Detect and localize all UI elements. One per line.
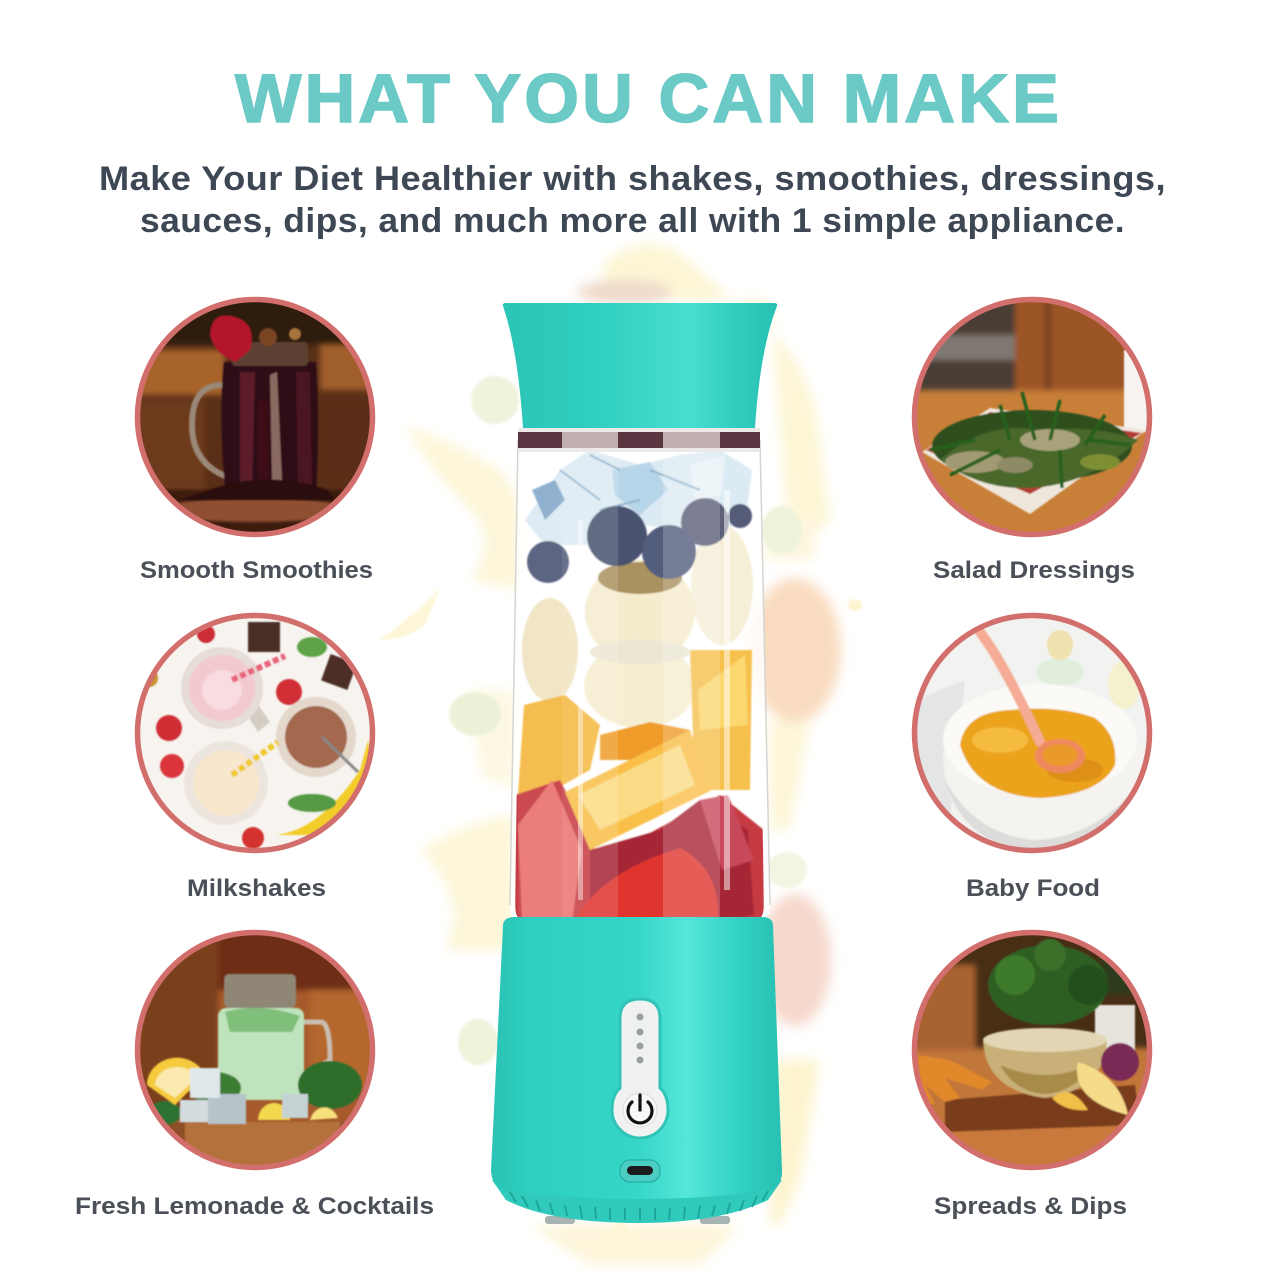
ring xyxy=(914,616,1150,850)
ring xyxy=(914,300,1150,534)
photo: chocolate smoothie jar xyxy=(140,302,370,532)
blender xyxy=(491,303,782,1224)
glass jar with fruit xyxy=(510,440,770,930)
title: WHAT YOU CAN MAKE xyxy=(235,60,1062,137)
label: Salad Dressings xyxy=(933,557,1135,584)
teal lid xyxy=(503,303,777,428)
subtitle: Make Your Diet Healthier with shakes, smoothies, dressings, xyxy=(99,160,1166,198)
photo: dip bowl with herbs xyxy=(917,935,1147,1165)
label: Milkshakes xyxy=(187,875,326,902)
ring xyxy=(138,300,372,534)
infographic canvas xyxy=(76,73,1164,1270)
panel: salad dressings xyxy=(910,295,1160,584)
panel: baby food xyxy=(910,610,1160,902)
ring xyxy=(138,616,372,850)
teal motor base xyxy=(491,917,782,1224)
panel: smooth smoothies xyxy=(130,295,380,584)
ring xyxy=(138,932,372,1168)
label: Spreads & Dips xyxy=(934,1193,1127,1220)
label: Baby Food xyxy=(966,875,1100,902)
photo: lemonade jar xyxy=(140,935,370,1165)
ring xyxy=(914,932,1150,1168)
usb-c port xyxy=(620,1160,660,1182)
panel: milkshakes xyxy=(130,610,380,902)
control panel xyxy=(612,999,668,1138)
subtitle xyxy=(99,160,1166,240)
panel: fresh lemonade and cocktails xyxy=(75,930,434,1220)
label: Smooth Smoothies xyxy=(140,557,373,584)
subtitle: sauces, dips, and much more all with 1 simple appliance. xyxy=(140,202,1125,240)
dark band under lid xyxy=(518,428,760,452)
photo: salad plate xyxy=(917,302,1146,532)
vented foot ring xyxy=(492,1180,782,1224)
panel: spreads and dips xyxy=(910,930,1160,1220)
photo: bowl of baby food xyxy=(917,618,1146,848)
label: Fresh Lemonade & Cocktails xyxy=(75,1193,434,1220)
base body xyxy=(491,917,782,1199)
photo: three milkshake jars xyxy=(140,618,370,848)
background fruit splash xyxy=(380,244,862,1265)
